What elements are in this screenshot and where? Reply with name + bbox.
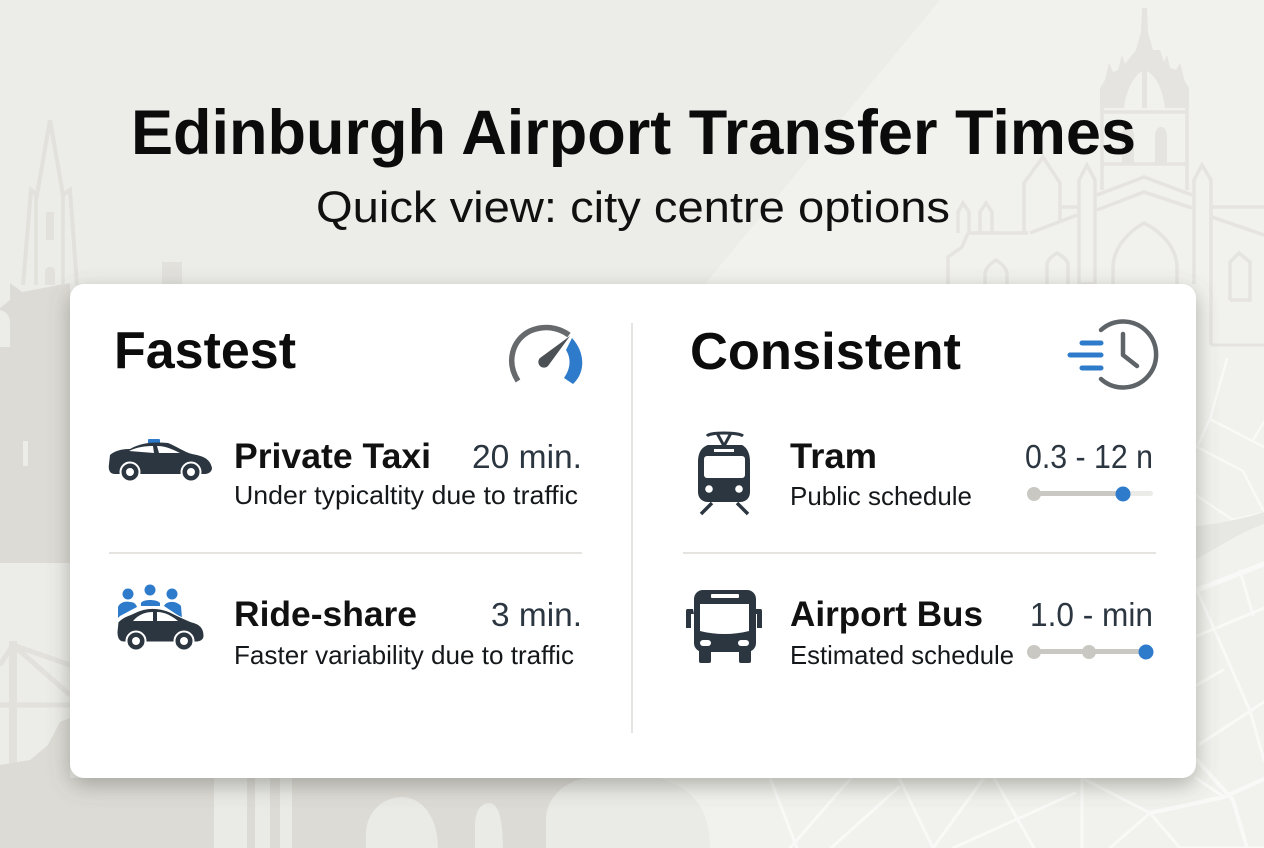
icon: bus [686, 590, 762, 663]
icon: taxi [109, 439, 212, 482]
label: private taxi: Private Taxi [234, 437, 431, 476]
icon: clock with speed lines [1070, 322, 1156, 388]
item: private taxi [109, 437, 582, 510]
card [70, 284, 1196, 778]
heading: Fastest: Fastest [114, 322, 296, 380]
title: Edinburgh Airport Transfer Times [131, 98, 1136, 168]
icon: speedometer [512, 328, 582, 384]
note: airport bus: Estimated schedule [790, 640, 1014, 670]
value: 3 min: 3 min. [491, 596, 582, 633]
note: tram: Public schedule [790, 481, 972, 511]
value: 20 min: 20 min. [472, 438, 582, 475]
label: ride-share: Ride-share [234, 595, 417, 634]
heading: Consistent: Consistent [690, 323, 961, 381]
panel: fastest [109, 322, 582, 670]
subtitle: Quick view: city centre options [316, 183, 950, 232]
slider: tram [1027, 486, 1153, 502]
background: street map [770, 359, 1264, 848]
label: tram: Tram [790, 437, 877, 476]
background: cathedral silhouette [948, 8, 1264, 345]
note: private taxi: Under typicaltity due to traffic [234, 480, 578, 510]
panel: consistent [686, 322, 1156, 670]
icon: tram [698, 433, 750, 514]
icon: ride-share car with people [117, 584, 204, 650]
label: airport bus: Airport Bus [790, 595, 983, 634]
note: ride-share: Faster variability due to traffic [234, 640, 574, 670]
item: tram [698, 433, 1153, 514]
item: airport bus [686, 590, 1154, 670]
background: castle and spire silhouette [0, 120, 182, 848]
item: ride-share [117, 584, 582, 670]
value: bus range: 1.0 - min [1030, 596, 1153, 633]
value: tram range: 0.3 - 12 n [1025, 438, 1153, 475]
panel: card background [70, 284, 1196, 778]
slider: airport bus [1027, 644, 1154, 660]
background: lower silhouette [60, 778, 710, 848]
